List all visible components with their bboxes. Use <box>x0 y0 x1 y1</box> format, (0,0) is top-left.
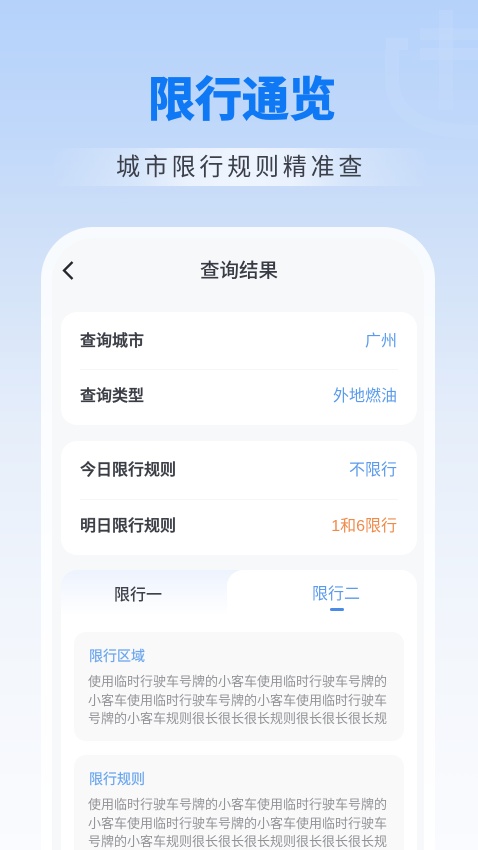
text: restricted area: 号牌的小客车规则很长很长很长规则很长很长很长规 <box>88 711 387 726</box>
screen heading: 查询结果 <box>200 260 278 282</box>
active tab background <box>227 570 417 620</box>
card: rules <box>61 441 417 555</box>
panel: restricted area <box>74 632 404 741</box>
label: query type: 查询类型 <box>80 388 144 405</box>
value: city: 广州 <box>365 333 397 350</box>
back arrow icon <box>62 261 74 280</box>
title: 限行通览 <box>148 73 336 126</box>
text: restriction rules: 小客车使用临时行驶车号牌的小客车使用临时行驶车 <box>88 816 387 830</box>
text: restriction rules: 号牌的小客车规则很长很长很长规则很长很长很长规 <box>88 834 387 849</box>
panel: tabs and details <box>61 570 417 850</box>
heading: restriction rules: 限行规则 <box>89 771 145 787</box>
text: restricted area <box>88 674 387 726</box>
value: type: 外地燃油 <box>333 388 397 405</box>
heading: restricted area: 限行区域 <box>89 648 145 664</box>
text: restriction rules: 使用临时行驶车号牌的小客车使用临时行驶车号牌的 <box>88 797 387 812</box>
value: tomorrow: 1和6限行 <box>331 518 397 535</box>
text: restriction rules <box>88 797 387 849</box>
label: today rule: 今日限行规则 <box>80 462 176 479</box>
label: query city: 查询城市 <box>80 333 144 350</box>
text: restricted area: 使用临时行驶车号牌的小客车使用临时行驶车号牌的 <box>88 674 387 689</box>
value: today: 不限行 <box>349 462 397 479</box>
tab one label: 限行一 <box>114 587 162 604</box>
text: restricted area: 小客车使用临时行驶车号牌的小客车使用临时行驶车 <box>88 692 387 708</box>
subtitle: 城市限行规则精准查 <box>116 154 366 181</box>
phone mockup <box>41 227 435 850</box>
phone screen <box>52 238 424 850</box>
panel: restriction rules <box>74 755 404 850</box>
card: query info <box>61 312 417 425</box>
tab two label: 限行二 <box>312 586 360 603</box>
active tab indicator <box>330 608 344 611</box>
background watermark icon <box>439 28 453 40</box>
label: tomorrow rule: 明日限行规则 <box>80 518 176 535</box>
subtitle band <box>50 148 430 186</box>
row divider <box>80 499 398 500</box>
inactive tab background <box>61 570 241 616</box>
row divider <box>80 369 398 370</box>
